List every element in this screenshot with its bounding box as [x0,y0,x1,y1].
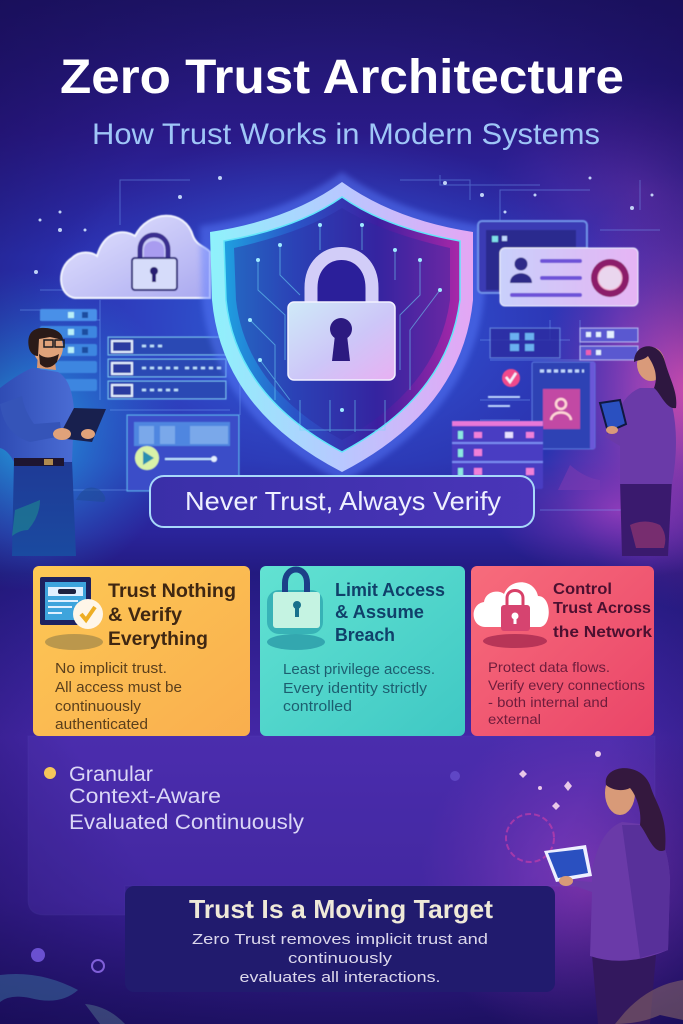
card heading: & Assume [335,601,424,622]
card body: external [488,711,541,727]
right server rows [490,328,638,360]
video panel with play icon [127,415,239,491]
panel: Trust Nothing and Verify Everything [33,566,250,736]
card heading: the Network [553,624,652,641]
foliage at the bottom corners [0,974,683,1024]
callout: Trust Is a Moving Target: continuously [288,950,393,967]
card heading: Breach [335,624,395,645]
shield with circuit pattern [200,172,486,482]
card heading: Trust Nothing [108,581,236,602]
card body: Every identity strictly [283,680,428,697]
subtitle: How Trust Works in Modern Systems [92,118,600,151]
person: man with tablet [0,328,106,556]
server stack lower right [452,421,543,489]
panel: Control Trust Across the Network [471,566,654,736]
central server rows [108,337,226,399]
icon: cloud with red padlock [474,582,549,648]
card heading: Trust Across [553,600,651,617]
check badge and connector [488,369,520,406]
card body: controlled [283,698,352,715]
trust attribute list: Evaluated Continuously [69,811,305,834]
card body: continuously [55,698,142,715]
callout: Trust Is a Moving Target: Trust Is a Moving Target [189,894,493,924]
panel: Limit Access and Assume Breach [260,566,465,736]
card body [488,659,645,727]
banner: Never Trust, Always Verify [150,476,534,527]
icon: yellow bullet [44,767,56,779]
callout: Trust Is a Moving Target: Zero Trust removes implicit trust and [192,931,488,948]
card body: - both internal and [488,694,608,710]
lower panel: trust attributes backdrop [28,736,655,915]
person: woman with clipboard tablet [544,768,670,1024]
trust attribute list: Granular [69,763,153,786]
card body [55,660,182,733]
card body: Verify every connections [488,677,645,693]
card heading [335,579,445,645]
plants along the scene base [12,465,665,548]
icon: cloud with padlock [61,216,210,298]
title: Zero Trust Architecture [60,51,624,104]
card body: All access must be [55,679,182,696]
card body: authenticated [55,716,148,733]
identity card panel [478,221,638,306]
icon: teal padlock [267,570,325,650]
callout: Trust Is a Moving Target: evaluates all interactions. [240,969,440,986]
banner: Never Trust, Always Verify: Never Trust, Always Verify [185,486,501,516]
card body: No implicit trust. [55,660,167,677]
card heading [553,581,652,641]
icon: document with check [40,577,103,650]
card body: Protect data flows. [488,659,610,675]
icon: central padlock [288,254,395,380]
trust attribute list [69,763,305,834]
circuit network background [20,175,660,510]
card heading: & Verify [108,605,182,626]
decorative network near woman [31,751,601,972]
card heading: Everything [108,629,208,650]
card body: Least privilege access. [283,661,435,678]
person: woman with tablet [600,346,676,556]
card body [283,661,435,715]
trust attribute list: Context-Aware [69,785,221,808]
card heading: Control [553,581,612,598]
left server racks [40,309,97,391]
callout: Trust Is a Moving Target [125,886,555,992]
card heading: Limit Access [335,579,445,600]
profile panel [532,362,595,449]
card heading [108,581,236,650]
